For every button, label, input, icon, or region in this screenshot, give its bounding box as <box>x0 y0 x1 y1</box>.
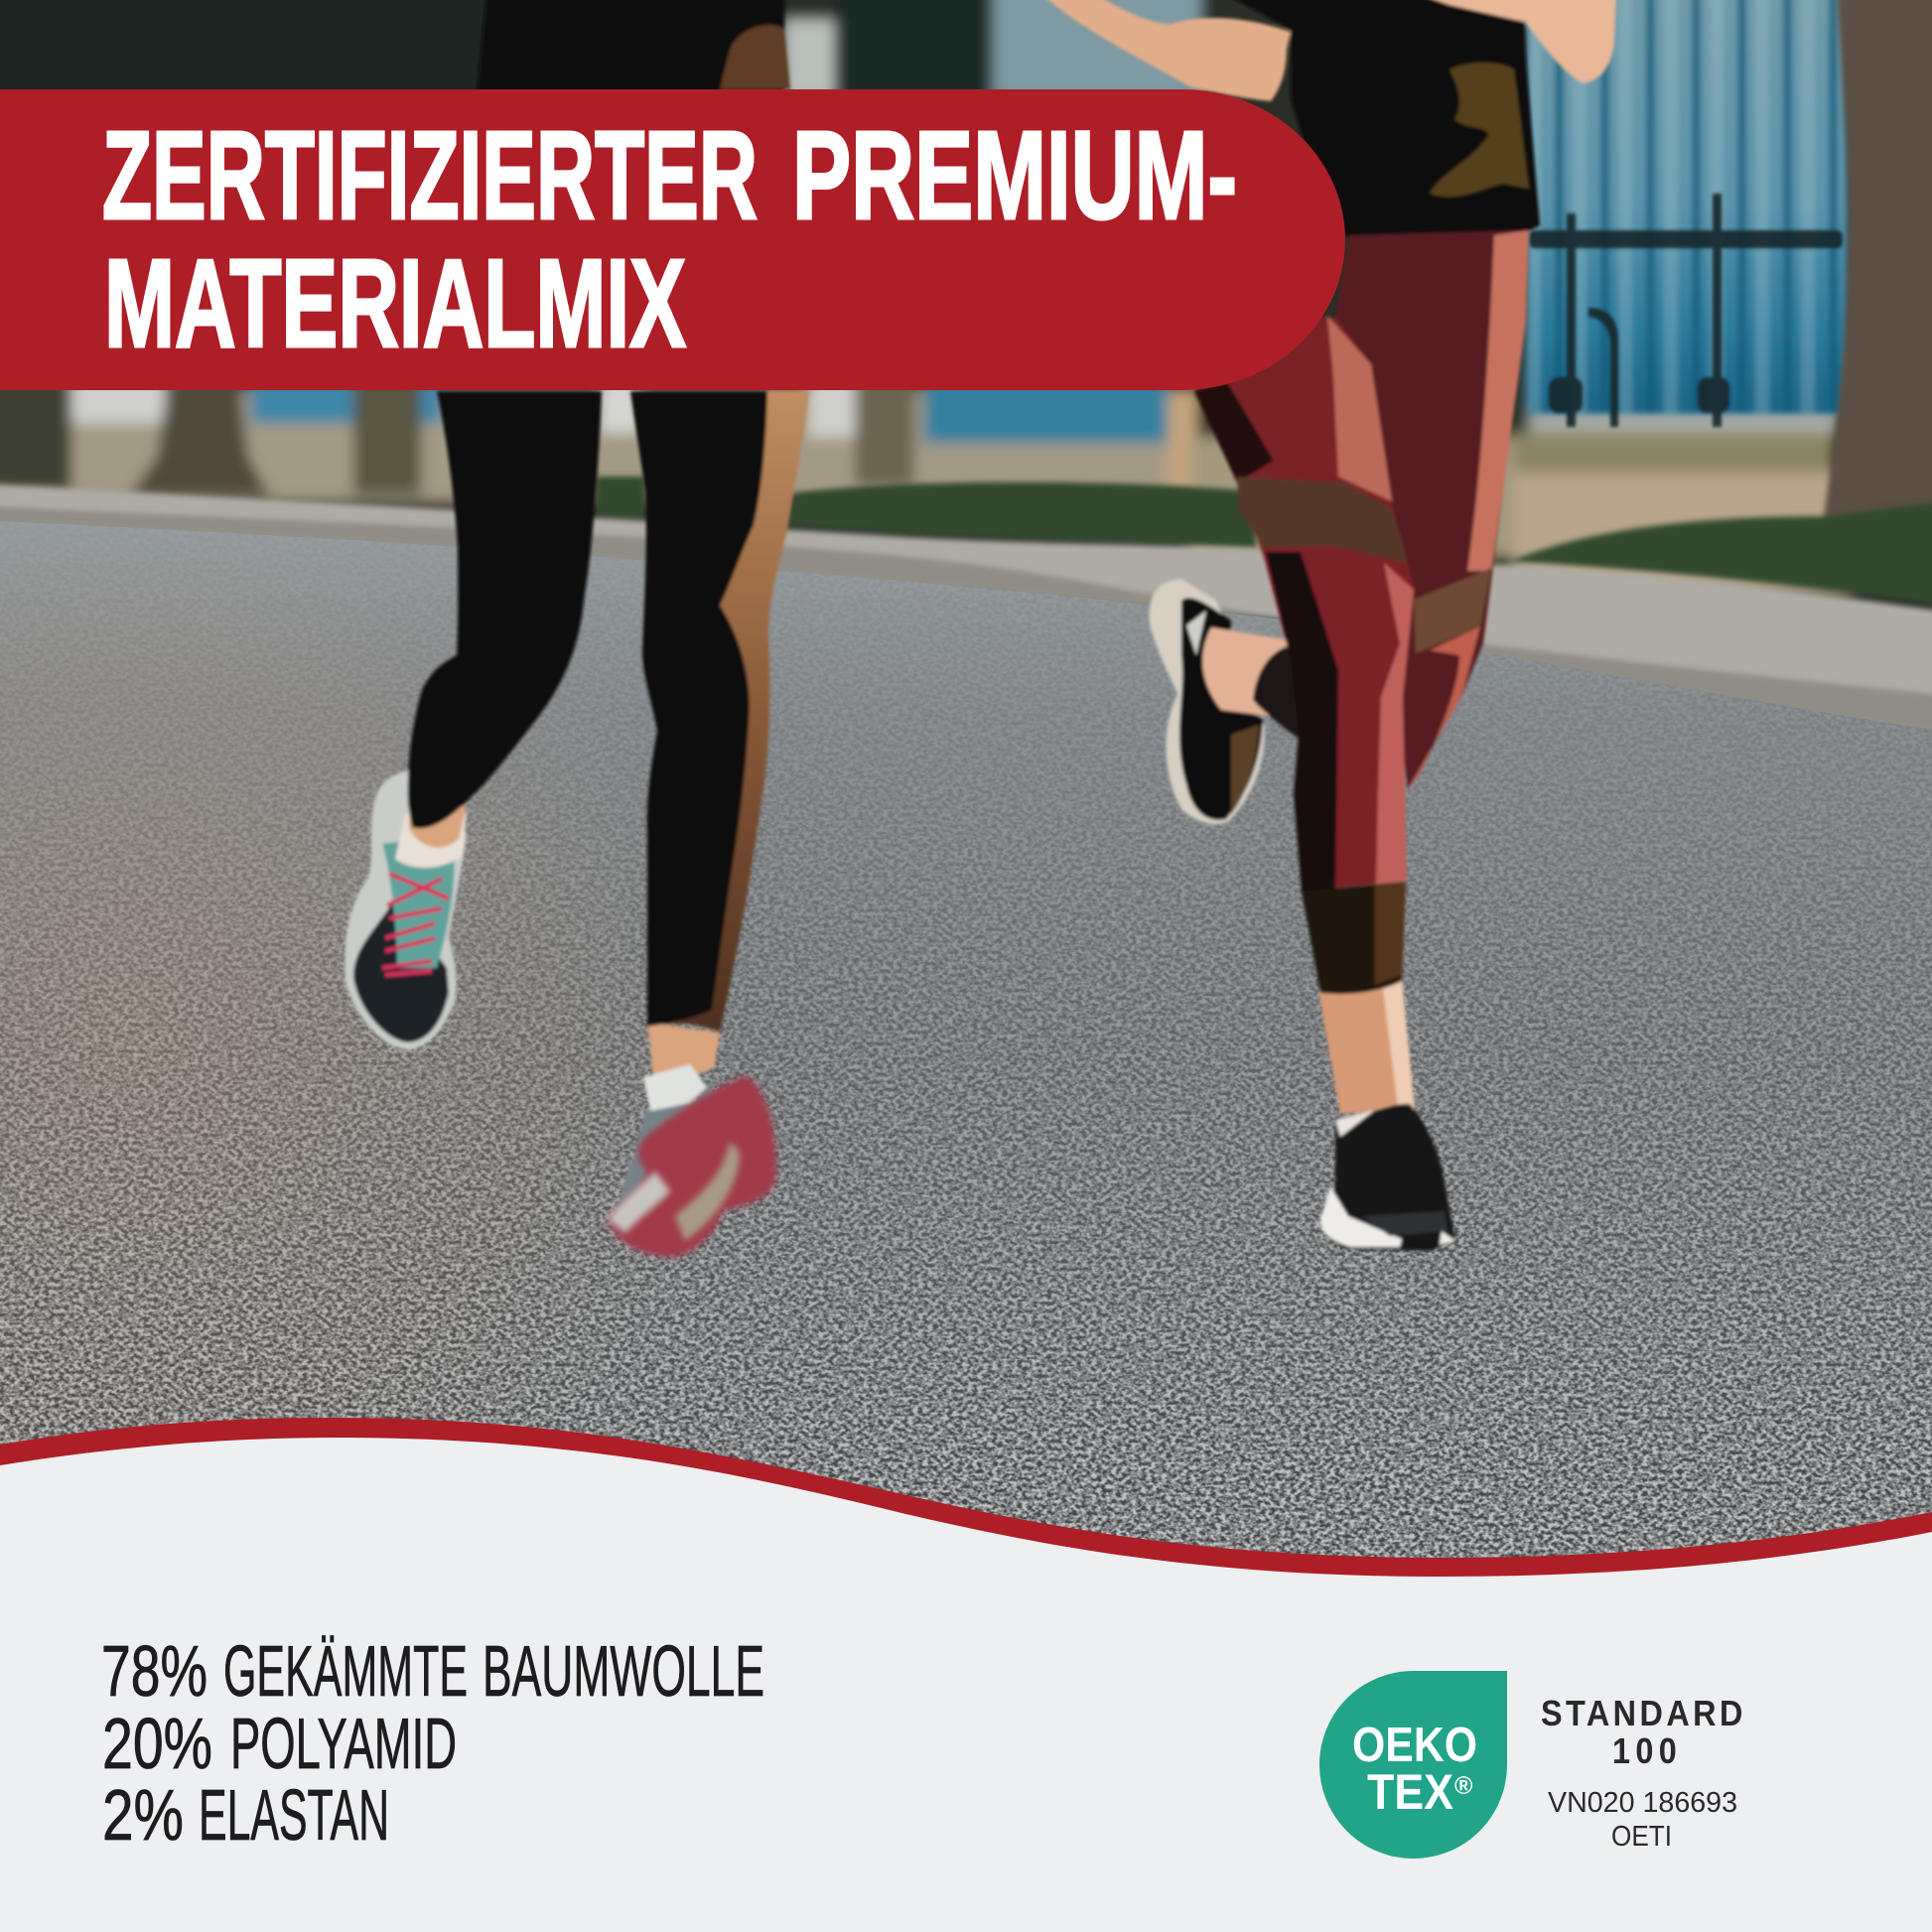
heading line 2: MATERIALMIX <box>104 233 686 373</box>
runner right: black running shoe <box>1320 1104 1455 1251</box>
certification text: 100 <box>1612 1731 1677 1771</box>
curb <box>0 484 1932 733</box>
icon: green drop logo: OEKO <box>1352 1719 1477 1772</box>
wave: red stripe <box>0 1418 1932 1932</box>
certification text: VN020 186693 <box>1548 1787 1737 1819</box>
runner right: black shirt <box>1226 0 1540 243</box>
certification text <box>1541 1694 1742 1853</box>
tree trunk <box>1822 0 1932 531</box>
runner right: back thigh and knee <box>1335 230 1529 789</box>
runner right: front thigh <box>1194 316 1414 892</box>
runner left: shoe on raised foot <box>345 770 467 1049</box>
icon: green drop logo: TEX <box>1367 1764 1453 1820</box>
material line 1: BAUMWOLLE <box>483 1631 764 1712</box>
material line 3: ELASTAN <box>199 1775 389 1856</box>
background: trees, fence and wall <box>0 0 1932 834</box>
material line 2: 20% <box>102 1704 212 1784</box>
OEKO-TEX certification badge <box>1319 1671 1742 1859</box>
runner right: left arm and hand <box>1042 0 1291 101</box>
runner right: torso, arms and leggings <box>1042 0 1616 1251</box>
grass verge <box>596 477 1932 606</box>
material line 1 <box>101 1631 764 1712</box>
runner right: back ankle <box>1202 627 1291 717</box>
runner right: lit panel on shin <box>1376 563 1414 886</box>
runner left: raised leg <box>408 391 602 828</box>
runner right: dark side panel <box>1266 552 1338 892</box>
certification text: STANDARD <box>1541 1694 1742 1733</box>
runner right: right arm <box>1422 0 1616 83</box>
heading line 1: PREMIUM- <box>792 105 1237 245</box>
runner left: supporting leg <box>630 391 809 1033</box>
runner right: back foot shoe <box>1149 579 1265 824</box>
material line 2: POLYAMID <box>230 1704 457 1784</box>
material composition list <box>101 1631 764 1856</box>
runner left: black leggings and torso <box>345 0 809 1257</box>
material line 2 <box>102 1704 457 1784</box>
material line 1: GEKÄMMTE <box>223 1631 468 1712</box>
runner left: ankle and sock <box>395 812 467 868</box>
runner right: mesh panel on lower leg <box>1302 882 1406 994</box>
heading line 1: ZERTIFIZIERTER <box>102 105 758 245</box>
material line 3: 2% <box>102 1775 184 1856</box>
runner left: supporting calf skin <box>647 1023 720 1092</box>
wave: light bottom panel <box>0 1438 1932 1932</box>
icon: green drop logo <box>1319 1671 1507 1859</box>
runner left: blurred shoe sole <box>608 1075 776 1257</box>
material line 3 <box>102 1775 389 1856</box>
title banner <box>0 89 1345 390</box>
runner left: white sock <box>643 1064 707 1127</box>
certification text: OETI <box>1611 1821 1672 1853</box>
icon: green drop logo: ® <box>1454 1772 1473 1800</box>
asphalt road <box>0 521 1932 1608</box>
wrought iron railing <box>1529 194 1843 427</box>
material line 1: 78% <box>101 1631 207 1712</box>
corrugated blue fence <box>1529 0 1845 413</box>
runner right: mesh panel on thigh <box>1237 477 1408 563</box>
runner right: calf skin <box>1318 978 1415 1114</box>
